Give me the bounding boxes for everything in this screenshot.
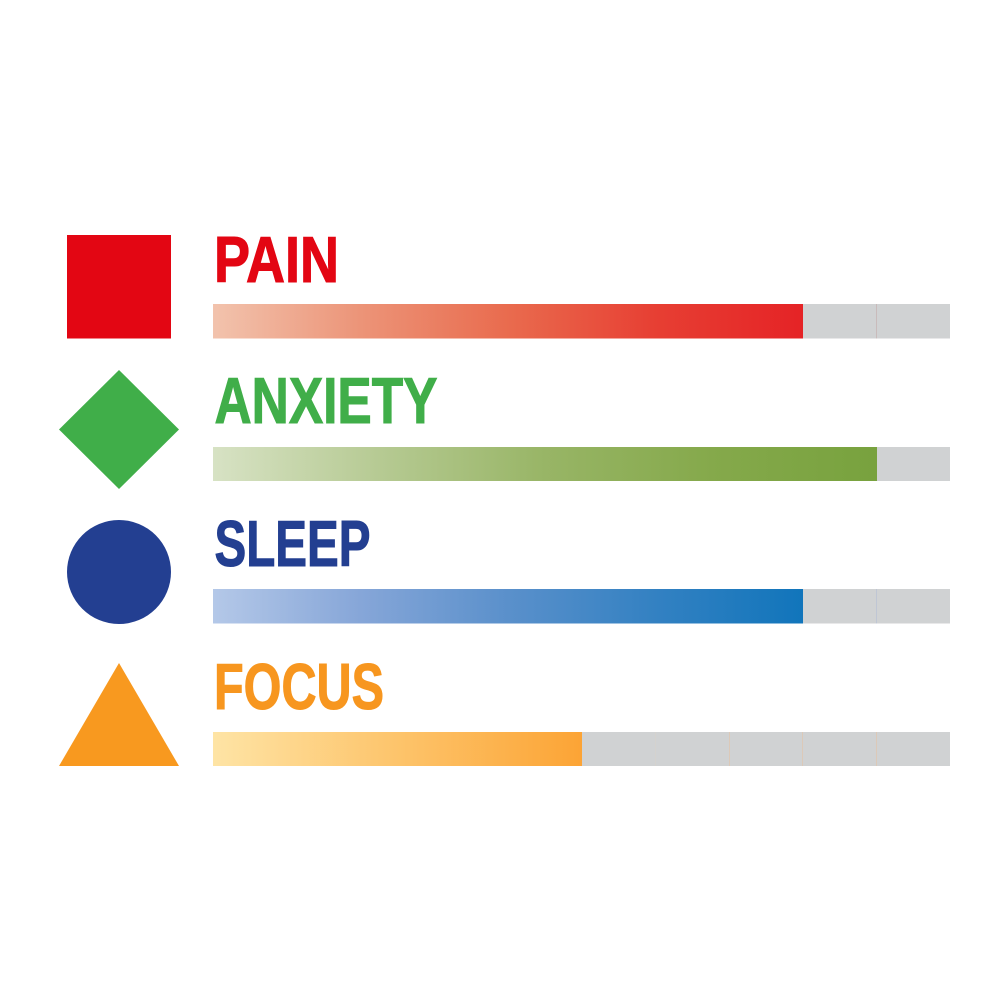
- panel: sleep: [67, 507, 950, 624]
- bar track: pain: [213, 304, 950, 338]
- heading: sleep: SLEEP: [214, 507, 370, 580]
- panel: anxiety: [59, 364, 950, 489]
- panel: focus: [59, 650, 950, 766]
- icon: blue circle: [67, 520, 171, 624]
- bar fill: pain: [213, 304, 803, 338]
- bar fill: anxiety: [213, 447, 877, 481]
- bar track: sleep: [213, 589, 950, 624]
- heading: pain: PAIN: [214, 223, 339, 296]
- heading: anxiety: ANXIETY: [214, 364, 438, 437]
- panel: pain: [67, 223, 950, 338]
- icon: green diamond: [59, 370, 179, 489]
- icon: orange triangle: [59, 663, 179, 766]
- bar fill: sleep: [213, 589, 803, 624]
- bar track: focus: [213, 732, 950, 766]
- bar track: anxiety: [213, 447, 950, 481]
- icon: red square: [67, 235, 171, 338]
- heading: focus: FOCUS: [214, 650, 384, 723]
- bar fill: focus: [213, 732, 582, 766]
